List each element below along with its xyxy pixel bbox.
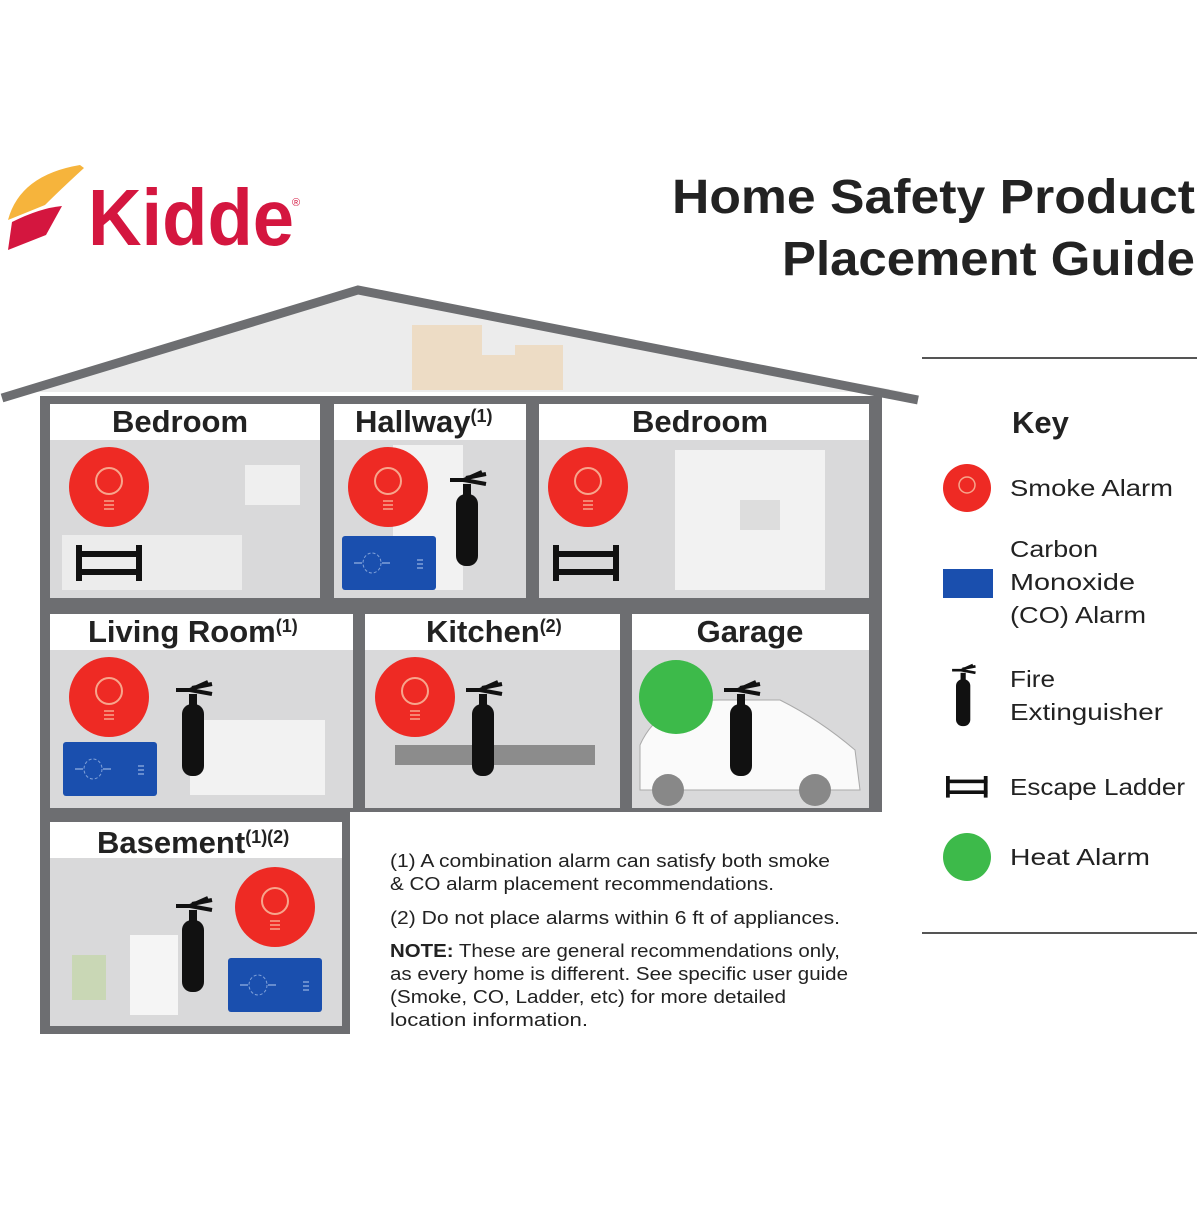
room: Living Room: Living Room xyxy=(88,614,276,649)
notes: (1) A combination alarm can satisfy both smoke xyxy=(390,851,830,871)
logo: Kidde: Kidde xyxy=(88,173,294,262)
room: Kitchen: (2) xyxy=(540,616,562,636)
room: Bedroom 2 xyxy=(539,404,869,598)
room: Kitchen xyxy=(365,614,620,808)
room: Bedroom 2: Bedroom xyxy=(632,404,768,439)
notes: location information. xyxy=(390,1010,588,1030)
room: Hallway: (1) xyxy=(470,406,492,426)
logo: Kidde xyxy=(8,165,300,262)
key: (CO) Alarm xyxy=(1010,602,1146,628)
key xyxy=(922,358,1197,933)
room: Hallway: Hallway xyxy=(355,404,470,439)
house xyxy=(2,290,918,1034)
title: Placement Guide xyxy=(782,233,1195,286)
title xyxy=(672,171,1195,286)
key: Carbon xyxy=(1010,536,1098,562)
room: Basement: (1)(2) xyxy=(245,827,289,847)
room: Basement: Basement xyxy=(97,825,245,860)
key: Key xyxy=(1012,405,1070,440)
notes: as every home is different. See specific user guide xyxy=(390,964,848,984)
notes xyxy=(390,851,848,1030)
notes: NOTE: These are general recommendations only, xyxy=(390,941,840,961)
room: Garage: Garage xyxy=(697,614,803,649)
room: Bedroom 1: Bedroom xyxy=(112,404,248,439)
key: Monoxide xyxy=(1010,569,1135,595)
notes: & CO alarm placement recommendations. xyxy=(390,874,774,894)
room: Garage xyxy=(632,614,869,808)
key: Fire xyxy=(1010,666,1055,692)
room: Bedroom 1 xyxy=(50,404,320,598)
key: Extinguisher xyxy=(1010,699,1163,725)
room: Living Room: (1) xyxy=(276,616,298,636)
room: Hallway xyxy=(334,404,526,598)
key: Smoke Alarm xyxy=(1010,475,1173,501)
key: Heat Alarm xyxy=(1010,844,1150,870)
notes: (2) Do not place alarms within 6 ft of appliances. xyxy=(390,908,840,928)
title: Home Safety Product xyxy=(672,171,1195,224)
notes: (Smoke, CO, Ladder, etc) for more detailed xyxy=(390,987,786,1007)
frame xyxy=(40,396,882,812)
room: Living Room xyxy=(50,614,353,808)
key: Escape Ladder xyxy=(1010,774,1185,800)
room: Basement xyxy=(50,822,342,1026)
logo: Kidde: ® xyxy=(292,197,300,209)
room: Kitchen: Kitchen xyxy=(426,614,540,649)
attic xyxy=(20,293,905,392)
